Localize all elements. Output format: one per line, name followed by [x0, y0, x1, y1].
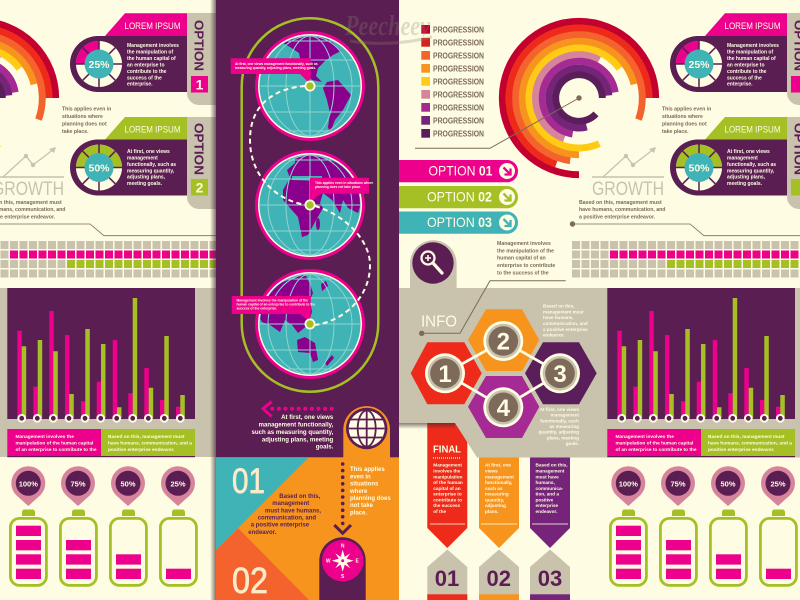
info note top: have humans, — [543, 315, 574, 320]
final tag: red: of the human — [433, 480, 463, 485]
option 1 card: enterprise. — [727, 82, 753, 88]
management note: Management involves — [497, 241, 551, 247]
location callout 3: Management involves the manipulation of the — [236, 298, 308, 302]
final tag: orange — [479, 440, 519, 548]
option 1 card: LOREM IPSUM — [724, 21, 781, 32]
option 2 card (left): 2 — [196, 180, 204, 196]
step 2 — [483, 321, 523, 361]
number 02: 02 — [232, 560, 268, 600]
growth block — [570, 147, 800, 236]
caption strip — [607, 429, 795, 457]
bar chart (left) — [7, 288, 195, 422]
location callout 3: success of the enterprise. — [236, 306, 277, 310]
globe: americas — [255, 31, 365, 141]
note text: This applies even in — [662, 106, 711, 112]
percentage pins: 25% — [770, 480, 786, 488]
final tag: orange: plans. — [485, 509, 499, 514]
final tag: red: of the — [433, 509, 446, 514]
info note bottom: functionally, such — [540, 418, 579, 423]
final tag: purple: endeavor. — [536, 509, 557, 514]
compass icon: S — [341, 574, 345, 580]
info note bottom: quantity, adjusting — [538, 430, 579, 435]
percentage pins (left): 25% — [170, 480, 186, 488]
option 1 card (left): enterprise. — [127, 82, 153, 88]
beige band (left) — [0, 288, 220, 457]
step 4 — [483, 387, 523, 427]
location callout 3: human capital of an enterprise to contribute to the — [236, 302, 315, 306]
panel body text: such as measuring quantity, — [251, 429, 334, 436]
orange text: not take — [350, 503, 374, 509]
option 2 card (left) — [70, 117, 216, 209]
caption strip: manipulation of the human capital — [616, 440, 693, 446]
option 2 card: 50% — [688, 162, 710, 174]
management note: to the success of the — [497, 270, 549, 276]
location callout 2: This applies even in situations where — [315, 181, 373, 185]
numbered pentagon 02 — [479, 550, 519, 600]
option 2 card (left): management — [127, 156, 158, 162]
numbered pentagon 02: 02 — [486, 566, 511, 591]
option 1 card (left): success of the — [127, 75, 162, 81]
option 1 card (left): the manipulation of — [127, 50, 173, 56]
option 2 card: LOREM IPSUM — [724, 124, 781, 136]
note text (left): planning does not — [62, 122, 107, 128]
growth block (left) — [0, 147, 220, 236]
compass icon: W — [326, 559, 331, 565]
final tag: red: the success — [433, 503, 461, 508]
orange text: situations — [350, 482, 379, 488]
caption strip: have humans, communication, and a — [708, 440, 792, 446]
number 01: 01 — [232, 462, 265, 501]
diagonal text: must have humans, — [265, 508, 321, 514]
panel body text: At first, one views — [281, 414, 334, 421]
option pills — [380, 160, 518, 234]
batteries — [610, 510, 796, 585]
center bottom orange section — [216, 406, 399, 600]
option 1 card (left): contribute to the — [127, 69, 167, 75]
option 1 card (left): 1 — [196, 76, 204, 92]
diagonal text: Based on this, — [279, 494, 321, 500]
option 1 card (left): the human capital of — [127, 56, 176, 62]
note text (left): This applies even in — [62, 106, 111, 112]
final tag: red: involves the — [433, 469, 461, 474]
option 2 card (left): 50% — [88, 162, 110, 174]
globe icon tab — [343, 406, 390, 458]
wheel pointer line — [415, 95, 582, 148]
location callout 1: At first, one views management functionally, such as — [235, 62, 318, 66]
progression legend: PROGRESSION — [433, 64, 484, 74]
option 1 card — [670, 13, 800, 105]
option 2 card (left): measuring quantity, — [127, 168, 175, 174]
option 1 card: success of the — [727, 75, 762, 81]
option 2 card (left): adjusting plans, — [127, 175, 166, 181]
final tag: orange: At first, one — [485, 463, 511, 468]
step 1 — [425, 353, 465, 393]
option 1 card (left): OPTION — [192, 20, 206, 71]
final tag: purple: management — [536, 469, 565, 474]
progression legend: PROGRESSION — [433, 116, 484, 126]
magnifier icon — [410, 240, 457, 288]
info note bottom: management — [551, 413, 579, 418]
panel body text: adjusting plans, meeting — [262, 436, 334, 443]
center panel: globes on purple — [216, 0, 399, 458]
info note top: management must — [543, 309, 584, 314]
location callout 1 — [231, 58, 318, 84]
dashed route — [250, 86, 370, 325]
progression legend: PROGRESSION — [433, 130, 484, 138]
right page: legend, wheel, options, info and dashboard — [380, 13, 800, 600]
final tag: purple: communica- — [536, 486, 564, 491]
compass icon: E — [356, 559, 360, 565]
green arch frame — [242, 18, 378, 392]
percentage pins (left): 50% — [120, 480, 136, 488]
option 1 card (left) — [70, 13, 216, 105]
pill: option 02: OPTION 02 — [427, 188, 492, 204]
option 1 card: contribute to the — [727, 69, 767, 75]
left page: repeated dashboard section — [0, 13, 220, 585]
final tag: red: contribute to — [433, 497, 462, 502]
final tag: red: capital of an — [433, 486, 461, 491]
info note bottom: plans, meeting — [547, 435, 579, 440]
management note: human capital of an — [497, 256, 546, 262]
final tag: red: manipulation — [433, 474, 463, 479]
step 2: 2 — [497, 329, 510, 356]
final tag columns — [427, 420, 570, 600]
option 2 card (left): meeting goals. — [127, 181, 163, 187]
info note top: a positive enterprise — [543, 327, 588, 332]
diagonal text: a positive enterprise — [251, 522, 310, 528]
progression legend: PROGRESSION — [433, 38, 484, 48]
location callout 3 — [232, 296, 315, 322]
globe: africa and eurasia — [255, 150, 365, 260]
progression legend: PROGRESSION — [433, 78, 484, 86]
growth block: Based on this, management must — [579, 200, 662, 206]
panel body text: goals. — [316, 444, 334, 451]
final tag: purple — [530, 440, 570, 548]
final tag: orange: adjusting — [485, 503, 506, 508]
final tag: orange: such as — [485, 486, 503, 491]
orange text: place. — [350, 510, 367, 516]
final tag: orange: management — [485, 474, 514, 479]
final tag: orange: functionally, — [485, 480, 512, 485]
progression legend: PROGRESSION — [433, 52, 484, 60]
step 3 — [540, 353, 580, 393]
option 2 card: measuring quantity, — [727, 168, 775, 174]
progress grid — [572, 241, 800, 279]
note text: situations where — [662, 114, 703, 120]
percentage pins (left): 100% — [19, 480, 38, 488]
growth block: GROWTH — [592, 179, 664, 200]
info note bottom: At first, one views — [540, 407, 579, 412]
orange text: even in — [350, 474, 371, 480]
info note top: Based on this, — [543, 304, 574, 308]
final tag: red — [427, 420, 467, 548]
final tag: orange: measuring — [485, 492, 509, 497]
final tag: red: enterprise to — [433, 492, 462, 497]
percentage pins (left) — [11, 466, 195, 506]
option 1 card (left): Management involves — [127, 43, 179, 49]
option 1 card (left): an enterprise to — [127, 62, 165, 68]
numbered pentagon 01 — [427, 550, 467, 600]
caption strip (left): Based on this, management must — [108, 434, 185, 440]
percentage pins: 100% — [619, 480, 638, 488]
caption strip: of an enterprise to contribute to the — [616, 447, 697, 453]
progression legend: PROGRESSION — [433, 26, 484, 34]
location pins — [304, 80, 316, 330]
percentage pins (left): 75% — [70, 480, 86, 488]
growth block: a positive enterprise endeavor. — [579, 214, 656, 220]
option 2 card: management — [727, 156, 758, 162]
percentage pins: 50% — [720, 480, 736, 488]
option 1 card: 25% — [688, 59, 710, 71]
radial progression chart — [502, 21, 656, 175]
progress grid (left) — [0, 241, 219, 279]
teal triangle — [216, 457, 309, 550]
beige info panel — [399, 288, 800, 458]
numbered pentagon 03 — [530, 550, 570, 600]
batteries (left) — [10, 510, 196, 585]
progression legend: PROGRESSION — [433, 90, 484, 100]
step 4: 4 — [497, 395, 511, 422]
option 1 card (left): 25% — [88, 59, 110, 71]
orange-red wedge — [216, 528, 309, 600]
shadow under info panel — [399, 423, 455, 429]
final tag: orange: quantity, — [485, 497, 504, 502]
progression legend: PROGRESSION — [433, 104, 484, 112]
caption strip (left): manipulation of the human capital — [16, 440, 93, 446]
note text (left): situations where — [62, 114, 103, 120]
progression legend — [421, 25, 484, 138]
globe: asia and australia — [255, 269, 365, 379]
info heading — [419, 314, 457, 336]
option 2 card: meeting goals. — [727, 181, 763, 187]
diagonal text: management — [272, 501, 309, 507]
caption strip: Management involves the — [616, 434, 674, 440]
diagonal text: endeavor. — [248, 530, 277, 536]
management note: enterprise to contribute — [497, 263, 555, 269]
pill: option 01: OPTION 01 — [428, 162, 493, 178]
percentage pins — [611, 466, 795, 506]
dotted down arrow — [334, 462, 351, 533]
caption strip: positive enterprise endeavor. — [708, 447, 774, 453]
final tag: purple: enterprise — [536, 503, 559, 508]
final tag: purple: tion, and a — [536, 492, 559, 497]
option 1 card: Management involves — [727, 43, 779, 49]
center panel shadow — [210, 0, 216, 600]
panel body text: management functionally, — [259, 422, 334, 428]
option 2 card — [670, 117, 800, 209]
caption strip (left): of an enterprise to contribute to the — [16, 447, 97, 453]
info note top: communication, and — [543, 321, 588, 326]
location callout 1: measuring quantity, adjusting plans, meeting goals. — [235, 66, 316, 70]
percentage pins: 75% — [670, 480, 686, 488]
final tag: orange: views — [485, 469, 498, 474]
info note bottom: goals. — [566, 441, 579, 446]
caption strip (left): positive enterprise endeavor. — [108, 447, 174, 453]
step 3: 3 — [553, 361, 567, 388]
option 2 card: adjusting plans, — [727, 175, 766, 181]
compass icon: N — [341, 544, 345, 550]
numbered pentagon 03: 03 — [538, 566, 562, 591]
orange text: where — [349, 489, 368, 495]
step 1: 1 — [438, 361, 452, 388]
note text: planning does not — [662, 122, 707, 128]
hexagon diagram — [411, 309, 597, 438]
option 1 card: the manipulation of — [727, 50, 773, 56]
dotted left arrow — [263, 402, 334, 416]
final tag: purple: must have — [536, 474, 559, 479]
compass icon — [319, 537, 366, 600]
option 2 card (left): functionally, such as — [127, 162, 176, 168]
location callout 2 — [310, 178, 373, 203]
watermark: Peecheey — [344, 11, 430, 42]
orange text: planning does — [350, 496, 391, 502]
option 1 card: an enterprise to — [727, 62, 765, 68]
growth block: have humans, communication, and — [579, 207, 665, 213]
numbered pentagon 01: 01 — [435, 566, 459, 591]
info leader line — [422, 281, 566, 333]
option 2 card (left): At first, one views — [127, 149, 170, 155]
caption strip (left): Management involves the — [16, 434, 74, 440]
option 1 card: the human capital of — [727, 56, 776, 62]
final tag: red: FINAL — [433, 443, 462, 455]
orange text: This applies — [350, 467, 385, 473]
location callout 2: planning does not take place. — [315, 185, 361, 189]
final tag: red: Management — [433, 463, 462, 468]
diagonal text: communication, and — [258, 516, 316, 522]
pill: option 03: OPTION 03 — [427, 214, 492, 230]
option 2 card: At first, one views — [727, 149, 770, 155]
management note: the manipulation of the — [497, 248, 554, 254]
info note bottom: as measuring — [549, 424, 579, 429]
final tag: purple: Based on this, — [536, 463, 568, 468]
final tag: purple: humans, — [536, 480, 555, 485]
bar chart — [607, 288, 795, 422]
option 1 card (left): LOREM IPSUM — [124, 21, 181, 32]
option 2 card (left): OPTION — [192, 123, 206, 175]
radial progression chart (left) — [0, 21, 56, 175]
note text: take place. — [662, 129, 689, 135]
note text (left): take place. — [62, 129, 89, 135]
final tag: purple: positive — [536, 497, 554, 502]
option 2 card (left): LOREM IPSUM — [124, 124, 181, 136]
info note top: endeavor. — [543, 332, 564, 338]
caption strip (left): have humans, communication, and a — [108, 440, 192, 446]
info heading: INFO — [421, 314, 457, 331]
option 2 card: functionally, such as — [727, 162, 776, 168]
caption strip: Based on this, management must — [708, 434, 785, 440]
caption strip (left) — [7, 429, 195, 457]
